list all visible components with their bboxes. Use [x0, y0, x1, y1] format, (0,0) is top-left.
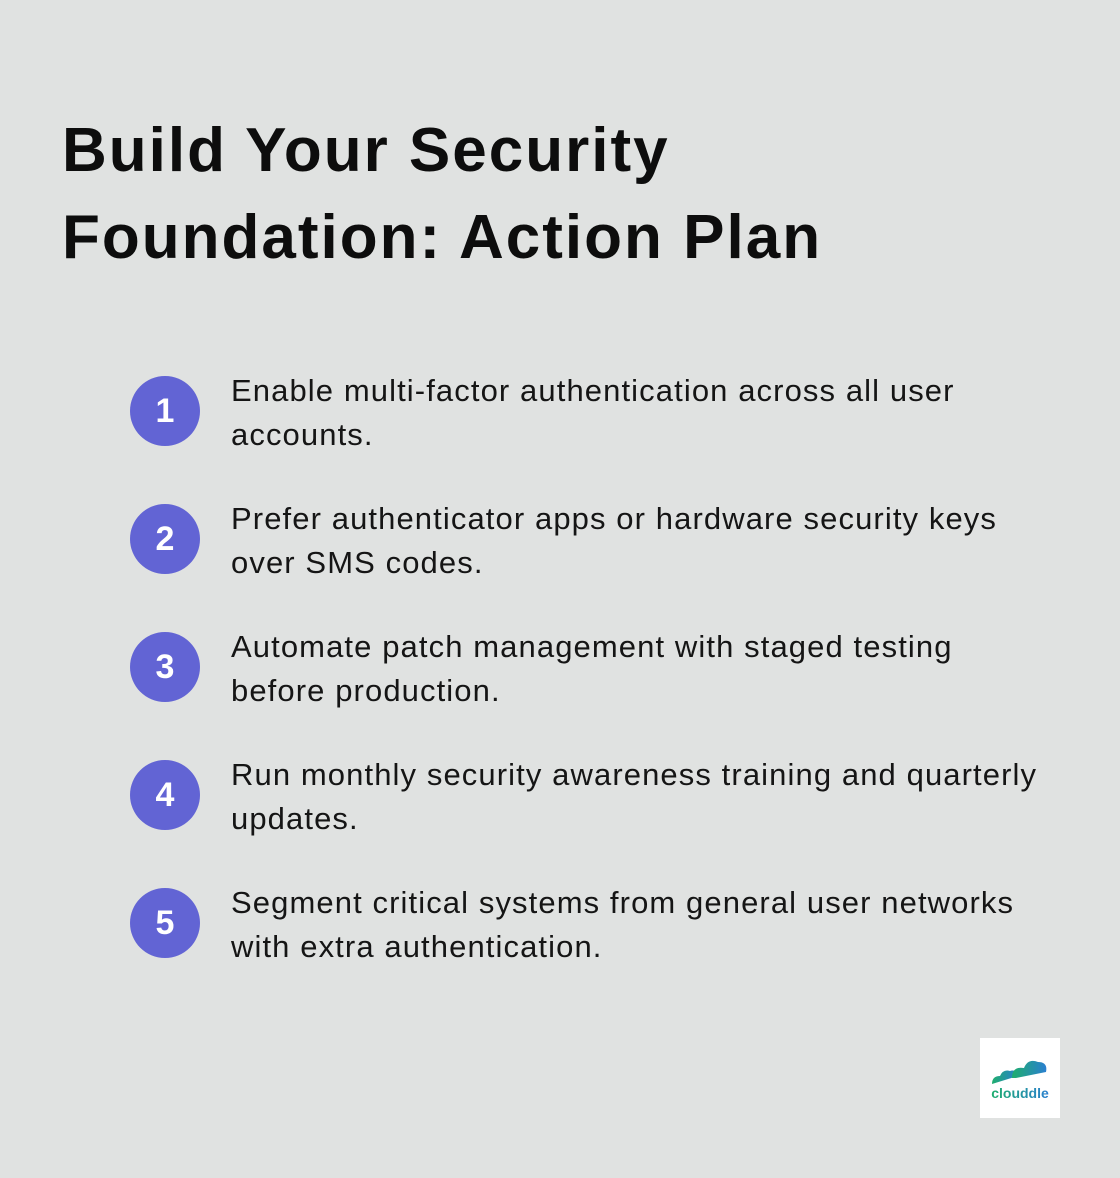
step 5: 5	[156, 904, 174, 942]
logo	[980, 1038, 1060, 1118]
step 1: 1	[156, 392, 174, 430]
step 5: with extra authentication.	[231, 929, 603, 964]
step 3	[130, 629, 953, 708]
step 2: 2	[156, 520, 174, 558]
step 1	[130, 373, 955, 452]
step 3: Automate patch management with staged testing	[231, 629, 953, 664]
step 4: 4	[156, 776, 174, 814]
step 2: over SMS codes.	[231, 545, 484, 580]
title: Build Your Security	[62, 116, 670, 185]
title: Foundation: Action Plan	[62, 203, 822, 272]
step 1: Enable multi-factor authentication across all user	[231, 373, 955, 408]
step 5: Segment critical systems from general user networks	[231, 885, 1014, 920]
step 3: before production.	[231, 673, 501, 708]
step 4: Run monthly security awareness training and quarterly	[231, 757, 1037, 792]
step 4	[130, 757, 1037, 836]
step 2	[130, 501, 997, 580]
step 2: Prefer authenticator apps or hardware security keys	[231, 501, 997, 536]
title	[62, 116, 822, 272]
step 3: 3	[156, 648, 174, 686]
step 1: accounts.	[231, 417, 374, 452]
step 5	[130, 885, 1014, 964]
step 4: updates.	[231, 801, 359, 836]
logo: clouddle	[991, 1085, 1049, 1101]
